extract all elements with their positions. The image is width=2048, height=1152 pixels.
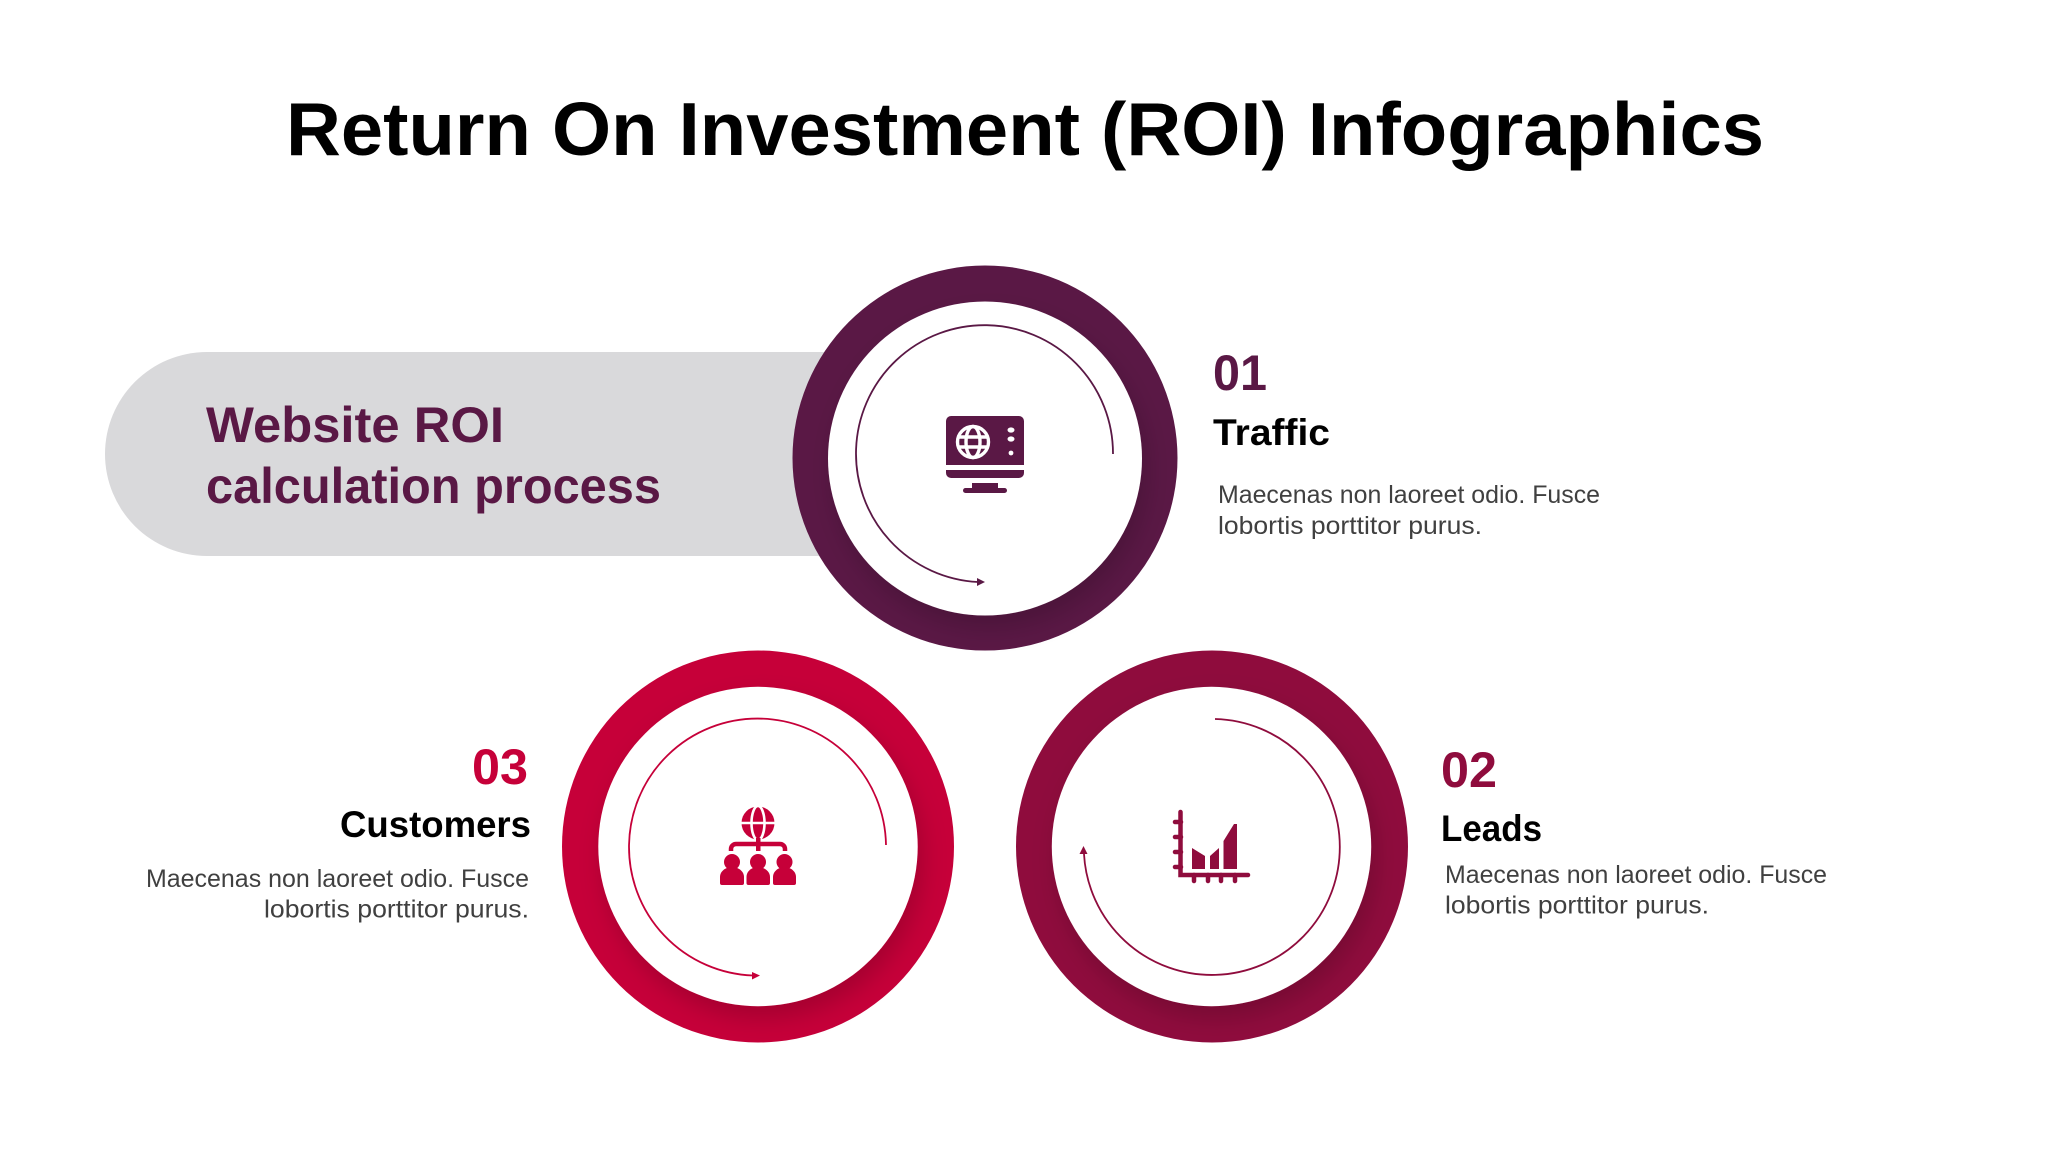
arrow 01 xyxy=(856,325,1113,586)
heading traffic: Traffic xyxy=(1213,412,1330,453)
icon: bar chart xyxy=(1175,812,1248,881)
heading leads: Leads xyxy=(1441,808,1542,849)
icon: globe with three people xyxy=(720,806,796,885)
panel: website ROI pill xyxy=(105,352,900,556)
description 03 xyxy=(146,865,529,924)
ring 03 inner xyxy=(598,687,918,1006)
number 03: 03 xyxy=(472,739,528,795)
arrow 02 xyxy=(1080,719,1340,975)
description 03: Maecenas non laoreet odio. Fusce xyxy=(146,865,529,893)
heading customers: Customers xyxy=(340,804,531,845)
number 02: 02 xyxy=(1441,742,1497,798)
description 02 xyxy=(1445,861,1827,920)
panel: step 03 ring xyxy=(562,650,954,1042)
panel: step 01 ring xyxy=(792,266,1178,650)
description 02: lobortis porttitor purus. xyxy=(1445,892,1709,920)
arrow 03 xyxy=(629,719,886,980)
pill background xyxy=(105,352,900,556)
number 01: 01 xyxy=(1213,345,1267,401)
panel: step 01 text xyxy=(1213,345,1600,540)
title: Return On Investment (ROI) Infographics xyxy=(286,87,1764,171)
ring 02 outer xyxy=(1016,650,1408,1042)
ring 03 outer xyxy=(562,650,954,1042)
ring 01 outer xyxy=(792,266,1178,650)
description 01: lobortis porttitor purus. xyxy=(1218,512,1482,540)
pill heading xyxy=(206,397,661,514)
description 01: Maecenas non laoreet odio. Fusce xyxy=(1218,481,1600,509)
ring 01 inner xyxy=(828,302,1142,616)
pill heading: Website ROI xyxy=(206,397,504,453)
panel: step 03 text xyxy=(146,739,531,924)
pill heading: calculation process xyxy=(206,458,661,514)
description 03: lobortis porttitor purus. xyxy=(264,896,529,924)
ring 02 inner xyxy=(1052,687,1371,1006)
panel: step 02 text xyxy=(1441,742,1827,920)
icon: monitor with globe xyxy=(946,416,1024,493)
panel: step 02 ring xyxy=(1016,650,1408,1042)
description 01 xyxy=(1218,481,1600,540)
description 02: Maecenas non laoreet odio. Fusce xyxy=(1445,861,1827,889)
